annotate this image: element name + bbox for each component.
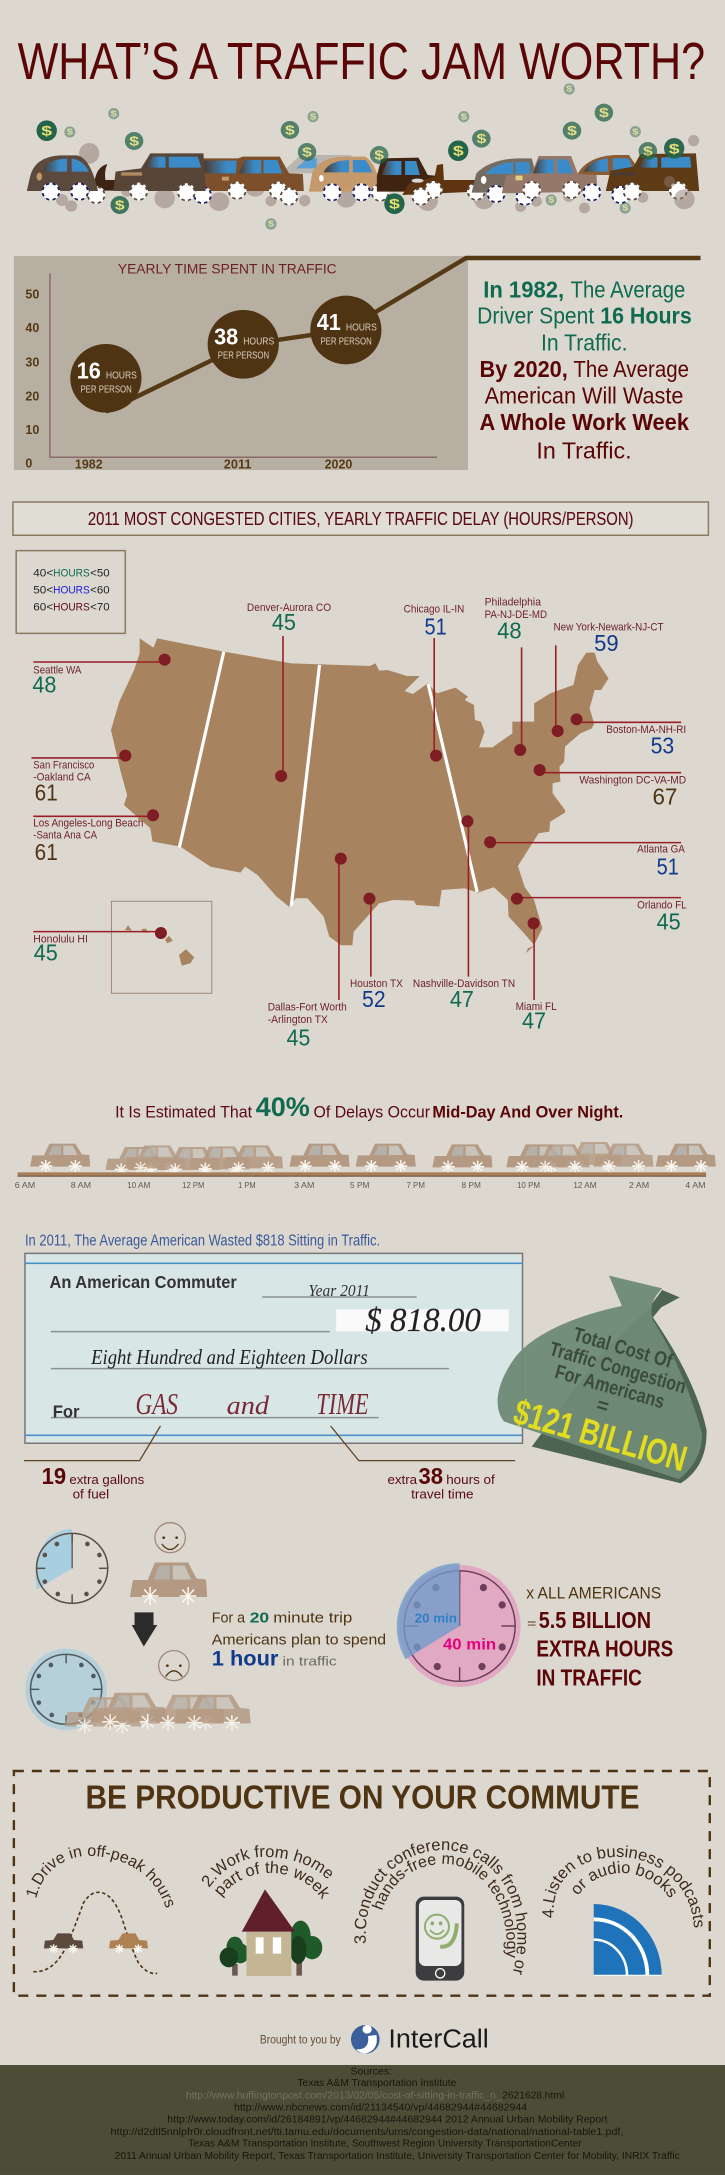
tip 1: drive in off-peak hours [26,1845,174,1974]
text block: 5.5 billion extra hours: = [527,1616,536,1631]
dollar coins: $ [643,145,653,159]
subheading: wasted 818 dollars: In 2011, The Average American Wasted $818 Sitting in Traffic. [25,1232,380,1249]
footer: sources: Texas A&M Transportation Institute [297,2077,457,2088]
bubble: 38 hours: HOURS [243,336,274,347]
city labels: San Francisco [33,759,95,771]
text block: 20 minute trip: in traffic [283,1654,337,1669]
logo: brought to you by InterCall: InterCall [388,2025,489,2053]
time zone lines [179,652,477,906]
city delay numbers [32,609,681,1051]
dollar coins: $ [461,113,468,122]
callout: 19 extra gallons of fuel [24,1426,160,1502]
tip 4: podcasts: 4.Listen to business podcasts [542,1845,704,1928]
city labels: Miami FL [516,1000,557,1012]
dollar coins: $ [632,128,639,137]
time labels: 10 AM [127,1181,150,1190]
legend: HOURS [53,600,90,613]
tip 2: work from home: part of the week [215,1860,329,1900]
timeline: cars through the day [15,1142,716,1190]
illustration: traffic jam of cars with money and smoke [27,83,699,230]
dollar coins: $ [599,106,609,120]
time labels [15,1181,706,1190]
bubble: 41 hours: 41 [317,309,341,335]
city labels: Chicago IL-IN [404,603,464,615]
check: $ 818.00 [365,1301,481,1338]
city labels: PA-NJ-DE-MD [485,608,547,620]
legend [16,551,125,633]
check: TIME [316,1388,369,1421]
dollar coins: $ [41,123,53,139]
bubble: 41 hours: PER PERSON [320,335,372,347]
x axis labels: 2020 [325,458,352,472]
check: Eight Hundred and Eighteen Dollars [90,1345,368,1369]
text block: 20 minute trip: 20 [250,1609,269,1626]
text block: 1982 vs 2020: In Traffic. [536,437,632,463]
text block: 5.5 billion extra hours: 5.5 BILLION [539,1607,651,1633]
tip 3: conference calls: hands-free mobile technology [372,1855,518,1958]
text block: 20 minute trip: For a [212,1609,245,1626]
time labels: 5 PM [350,1181,369,1190]
callout: 19 extra gallons of fuel: of fuel [73,1487,109,1502]
tip 1: drive in off-peak hours: 1.Drive in off-peak hours [26,1845,174,1908]
panel: yearly time spent in traffic chart [14,256,701,472]
map shape [111,638,609,945]
footer: sources [0,2065,725,2175]
dollar coins: $ [129,135,140,149]
dollar coins: $ [389,196,401,212]
money bag: total cost of congestion: Traffic Congestion [547,1338,688,1398]
city delay numbers: 47 [450,986,474,1012]
city delay numbers: 51 [424,614,447,639]
time labels: 7 PM [406,1181,425,1190]
city labels: Houston TX [350,977,403,989]
callout: 19 extra gallons of fuel: 19 [42,1463,66,1489]
y axis labels: 10 [25,423,39,437]
statement: 40 percent of delays: It Is Estimated That [115,1103,252,1121]
icon: clock with 20 and 40 min segments [397,1563,521,1687]
legend: HOURS [53,567,90,579]
text block: 5.5 billion extra hours: IN TRAFFIC [536,1665,642,1690]
tip 4: podcasts [542,1845,704,1976]
money bag: total cost of congestion: For Americans [552,1361,667,1413]
dollar coins [37,83,684,230]
money bag: total cost of congestion: Total Cost Of [571,1324,675,1373]
statement: 40 percent of delays: Mid-Day And Over Night. [432,1103,623,1121]
text block: 1982 vs 2020: Driver Spent [477,302,594,329]
y axis labels: 0 [25,457,32,471]
dollar coins: $ [566,85,573,94]
smoke puffs [56,135,699,213]
time labels: 8 PM [461,1181,481,1190]
city delay numbers: 51 [657,854,679,879]
time labels: 10 PM [517,1181,540,1190]
callout: extra 38 hours of travel time: 38 [418,1463,443,1489]
check: and [227,1390,270,1420]
city delay numbers: 61 [35,839,58,865]
bubble: 16 hours: HOURS [106,370,137,381]
bubble: 16 hours: 16 [77,358,101,383]
city labels: -Arlington TX [268,1013,328,1025]
time labels: 2 AM [629,1181,649,1190]
logo: brought to you by InterCall [260,2025,489,2054]
tip 4: podcasts: or audio books [572,1861,676,1898]
check: GAS [135,1388,178,1421]
dollar coins: $ [67,128,74,137]
leader lines [31,636,681,1000]
time labels: 8 AM [71,1181,91,1190]
time labels: 1 PM [238,1181,256,1190]
check [25,1253,523,1443]
city labels: Honolulu HI [33,932,88,945]
city labels: -Santa Ana CA [33,829,98,841]
x axis labels: 2011 [224,458,252,472]
text block: 20 minute trip: Americans plan to spend [212,1631,386,1648]
city delay numbers: 48 [32,672,56,698]
callout: extra 38 hours of travel time: travel time [411,1487,474,1502]
dollar coins: $ [111,110,118,119]
city labels: Nashville-Davidson TN [413,977,515,989]
trend line [106,258,701,412]
dollar coins: $ [268,220,275,229]
city labels: -Oakland CA [33,771,91,783]
check: Year 2011 [308,1282,370,1300]
text block: 5.5 billion extra hours [526,1585,673,1690]
callout: extra 38 hours of travel time: hours of [446,1472,495,1487]
bubble: 16 hours [70,344,141,413]
city pins [119,654,583,939]
money bag: total cost of congestion: = [594,1394,611,1418]
city delay numbers: 45 [34,940,58,965]
tip 3: conference calls: 3.Conduct conference calls from home or [354,1841,528,1975]
bubble: 38 hours [208,310,279,379]
Hawaii inset [111,901,212,993]
text block: 20 minute trip [212,1609,386,1671]
check: An American Commuter [49,1273,237,1292]
dollar coins: $ [567,124,577,138]
city delay numbers: 59 [594,630,619,656]
dollar coins: $ [310,113,317,122]
footer: sources: 2621628.html [502,2089,564,2101]
dollar coins: $ [374,149,385,163]
legend: <70 [90,600,110,613]
legend: <50 [90,567,110,579]
bubble: 38 hours: 38 [214,324,238,349]
city delay numbers: 61 [35,780,58,806]
legend: 50< [33,584,53,596]
statement: 40 percent of delays: Of Delays Occur [314,1103,430,1121]
y axis labels: 20 [25,390,39,404]
city delay numbers: 45 [657,909,681,934]
y axis labels: 40 [25,321,39,335]
city delay numbers: 67 [652,784,677,809]
heading: most congested cities [13,502,708,535]
footer: sources: http://www.huffingtonpost.com/2013/02/05/cost-of-sitting-in-traffic_n_ [186,2089,502,2101]
callout: extra 38 hours of travel time: extra [387,1472,417,1487]
icon: clock, 1 hour, unhappy cars [25,1649,251,1733]
y axis labels: 30 [25,356,39,370]
time labels: 12 AM [573,1181,596,1190]
city delay numbers: 45 [287,1025,310,1051]
tip 2: work from home [202,1845,332,1976]
y axis labels: 50 [25,288,39,302]
city labels: Philadelphia [485,596,541,608]
city delay numbers: 48 [497,618,522,644]
city delay numbers: 52 [362,986,386,1012]
panel: be productive on your commute [12,1770,711,1997]
y axis labels [25,288,39,471]
tip 2: work from home: 2.Work from home [202,1845,332,1888]
money bag: total cost of congestion [498,1276,707,1483]
arrow [132,1612,157,1647]
legend: <60 [90,584,110,596]
city labels: Denver-Aurora CO [247,601,331,613]
footer: sources: http://www.nbcnews.com/id/21134540/vp/44682944#44682944 [234,2102,527,2113]
statement: 40 percent of delays [115,1092,623,1122]
footer: sources: Sources: [350,2065,392,2077]
x axis labels [75,458,352,472]
dollar coins: $ [285,124,295,138]
city labels: Seattle WA [33,663,82,676]
map: United States with city delays [31,596,687,1051]
city delay numbers: 47 [522,1008,546,1033]
callout: 19 extra gallons of fuel: extra gallons [69,1472,144,1487]
road [18,1172,706,1177]
text block: 5.5 billion extra hours: x ALL AMERICANS [526,1585,661,1603]
city delay numbers: 53 [651,733,674,758]
dollar coins: $ [669,141,680,157]
footer: sources: Texas A&M Transportation Institute, Southwest Region University TransportationCenter [188,2138,582,2149]
dollar coins: $ [476,132,487,146]
text block: 1982 vs 2020: In Traffic. [541,329,627,355]
logo: brought to you by InterCall: Brought to you by [260,2033,341,2047]
puffs in front of cars [664,176,695,209]
dollar coins: $ [622,204,629,213]
icon: clock, 20 minutes, happy car [36,1523,207,1605]
x axis labels: 1982 [75,458,103,472]
city delay numbers: 45 [272,609,296,635]
bubble: 16 hours: PER PERSON [80,384,132,395]
city labels: Los Angeles-Long Beach [33,817,143,829]
dollar coins: $ [548,196,555,205]
city labels: Dallas-Fort Worth [268,1001,347,1013]
city labels: Atlanta GA [637,843,685,855]
legend: 40< [33,567,53,579]
dollar coins: $ [115,199,125,213]
bubble: 38 hours: PER PERSON [218,350,269,361]
chart title: YEARLY TIME SPENT IN TRAFFIC [118,261,337,277]
text block: 1982 vs 2020 [477,276,692,463]
time labels: 4 AM [685,1181,706,1190]
time labels: 6 AM [15,1181,35,1190]
city labels: New York-Newark-NJ-CT [553,621,664,633]
check: For [53,1402,80,1421]
dollar coins: $ [302,146,312,160]
time labels: 12 PM [182,1181,204,1190]
statement: 40 percent of delays: 40% [256,1092,310,1122]
text block: 20 minute trip: minute trip [273,1609,352,1626]
text block: 20 minute trip: 1 hour [212,1647,278,1671]
city labels: Orlando FL [637,898,687,911]
text block: 1982 vs 2020: By 2020, [480,355,568,382]
cars [27,153,699,206]
bubble: 41 hours [310,296,381,364]
legend: HOURS [53,584,90,596]
time labels: 3 AM [294,1181,314,1190]
dollar coins: $ [453,143,464,159]
icon: clock with 20 and 40 min segments: 40 min [443,1635,496,1653]
icon: clock with 20 and 40 min segments: 20 min [415,1611,457,1626]
legend: 60< [33,600,53,613]
city labels [33,596,687,1025]
callout: extra 38 hours of travel time [331,1426,515,1502]
text block: 1982 vs 2020: In 1982, [483,276,564,302]
bubble: 41 hours: HOURS [346,321,377,333]
cars on road [30,1142,716,1175]
